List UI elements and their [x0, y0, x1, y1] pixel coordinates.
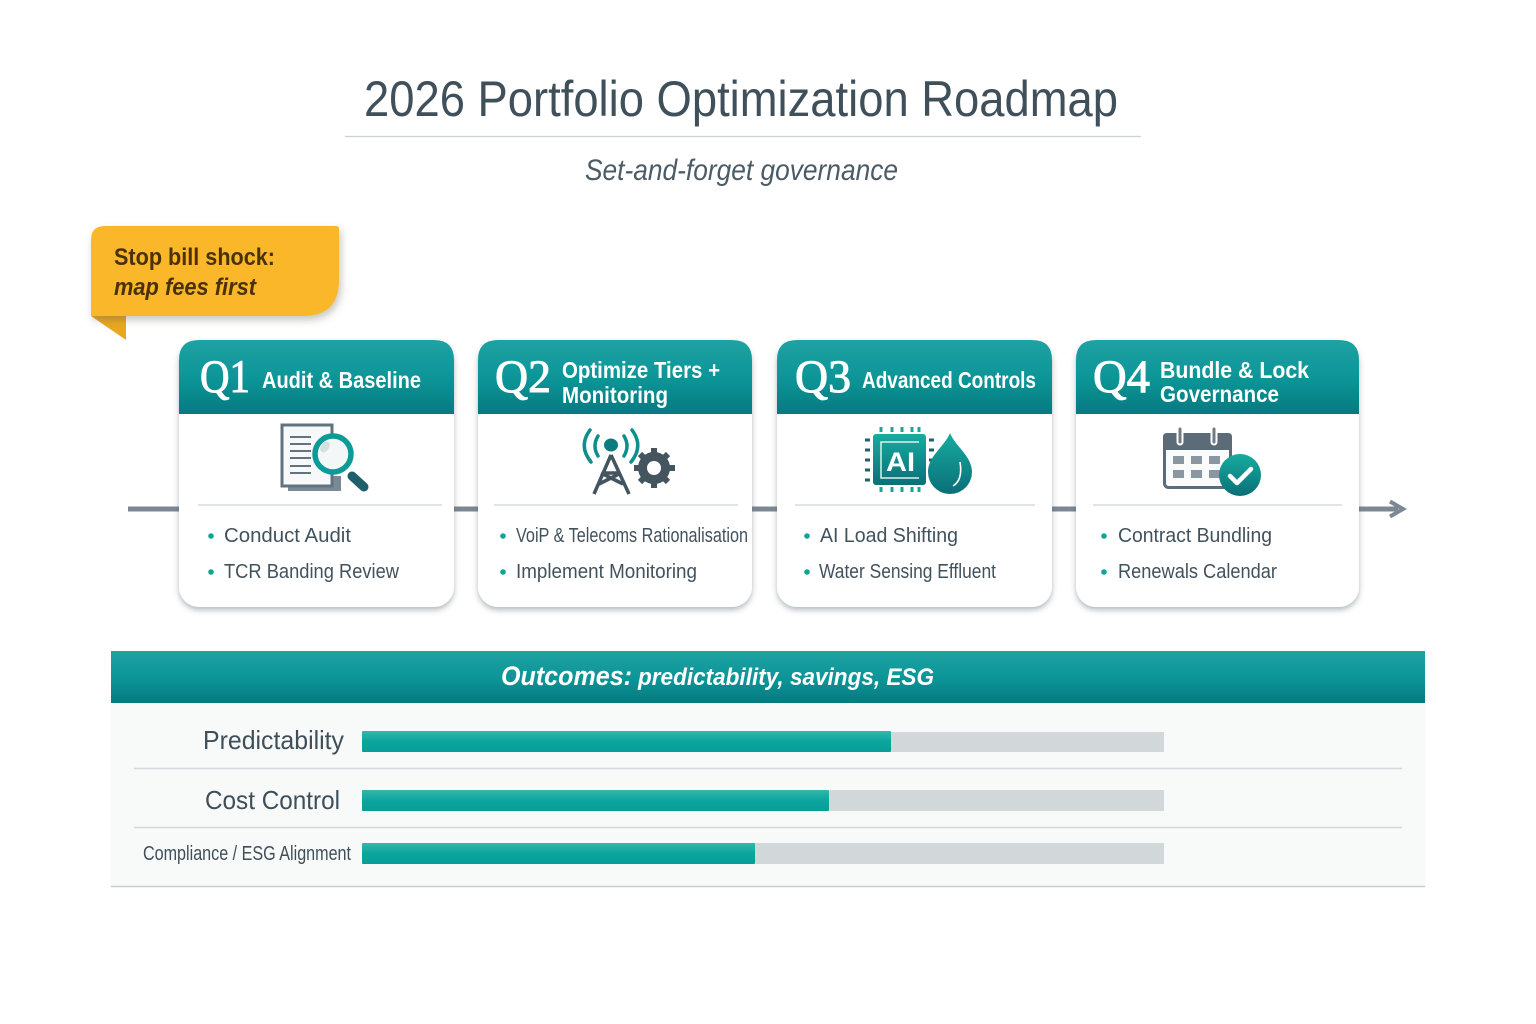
- icon: document and magnifier: [282, 425, 364, 491]
- Q3 bullet list: [804, 525, 996, 583]
- Q1 heading: Audit & Baseline: [262, 367, 421, 393]
- panel: Q1 card: [179, 340, 454, 607]
- bar row: compliance and ESG alignment: Compliance / ESG Alignment: [143, 843, 351, 865]
- Q3 heading: Q3: [795, 351, 851, 403]
- bar row: compliance and ESG alignment: [143, 843, 1164, 865]
- Q4 bullet list: [1101, 525, 1277, 583]
- Q2 heading: [495, 351, 720, 408]
- bar row: predictability: [203, 725, 1164, 755]
- Q4 bullet list: Contract Bundling: [1118, 525, 1272, 547]
- title: 2026 Portfolio Optimization Roadmap: [364, 71, 1118, 127]
- panel: Q4 card: [1076, 340, 1359, 607]
- panel: Q2 card: [478, 340, 752, 607]
- bar row: cost control: Cost Control: [205, 785, 340, 815]
- Q4 heading: Q4: [1093, 351, 1150, 403]
- Q2 bullet list: [500, 525, 748, 583]
- panel: Q3 card: [777, 340, 1052, 607]
- Q2 bullet list: VoiP & Telecoms Rationalisation: [516, 525, 748, 547]
- callout: stop bill shock: [91, 226, 339, 340]
- Q1 heading: [200, 351, 421, 403]
- Q4 heading: Governance: [1160, 381, 1279, 407]
- callout: stop bill shock: map fees first: [114, 274, 257, 301]
- timeline arrow: [128, 502, 1403, 516]
- outcomes header band: predictability, savings, ESG: [637, 664, 934, 691]
- Q2 heading: Q2: [495, 351, 551, 403]
- icon: signal tower and gear: [584, 430, 675, 494]
- Q4 bullet list: Renewals Calendar: [1118, 561, 1277, 583]
- Q3 heading: Advanced Controls: [862, 367, 1036, 393]
- Q2 bullet list: Implement Monitoring: [516, 561, 697, 583]
- Q3 bullet list: Water Sensing Effluent: [819, 561, 996, 583]
- Q1 bullet list: [208, 525, 399, 583]
- icon: AI chip and water drop: AI: [886, 447, 915, 477]
- callout: stop bill shock: Stop bill shock:: [114, 244, 275, 271]
- bar row: cost control: [205, 785, 1164, 815]
- Q2 heading: Optimize Tiers +: [562, 357, 720, 383]
- panel: outcomes: [111, 651, 1425, 887]
- outcomes header band: [111, 651, 1425, 703]
- Q4 heading: [1093, 351, 1309, 407]
- Q2 heading: Monitoring: [562, 382, 668, 408]
- Q1 bullet list: Conduct Audit: [224, 525, 351, 547]
- Q1 bullet list: TCR Banding Review: [224, 561, 399, 583]
- bar row: predictability: Predictability: [203, 725, 344, 755]
- subtitle: Set-and-forget governance: [585, 154, 898, 187]
- Q1 heading: Q1: [200, 351, 250, 403]
- icon: AI chip and water drop: [865, 427, 972, 494]
- outcomes header band: Outcomes:: [501, 661, 632, 691]
- icon: calendar with check: [1163, 429, 1261, 496]
- Q4 heading: Bundle & Lock: [1160, 357, 1309, 383]
- Q3 heading: [795, 351, 1036, 403]
- Q3 bullet list: AI Load Shifting: [820, 525, 958, 547]
